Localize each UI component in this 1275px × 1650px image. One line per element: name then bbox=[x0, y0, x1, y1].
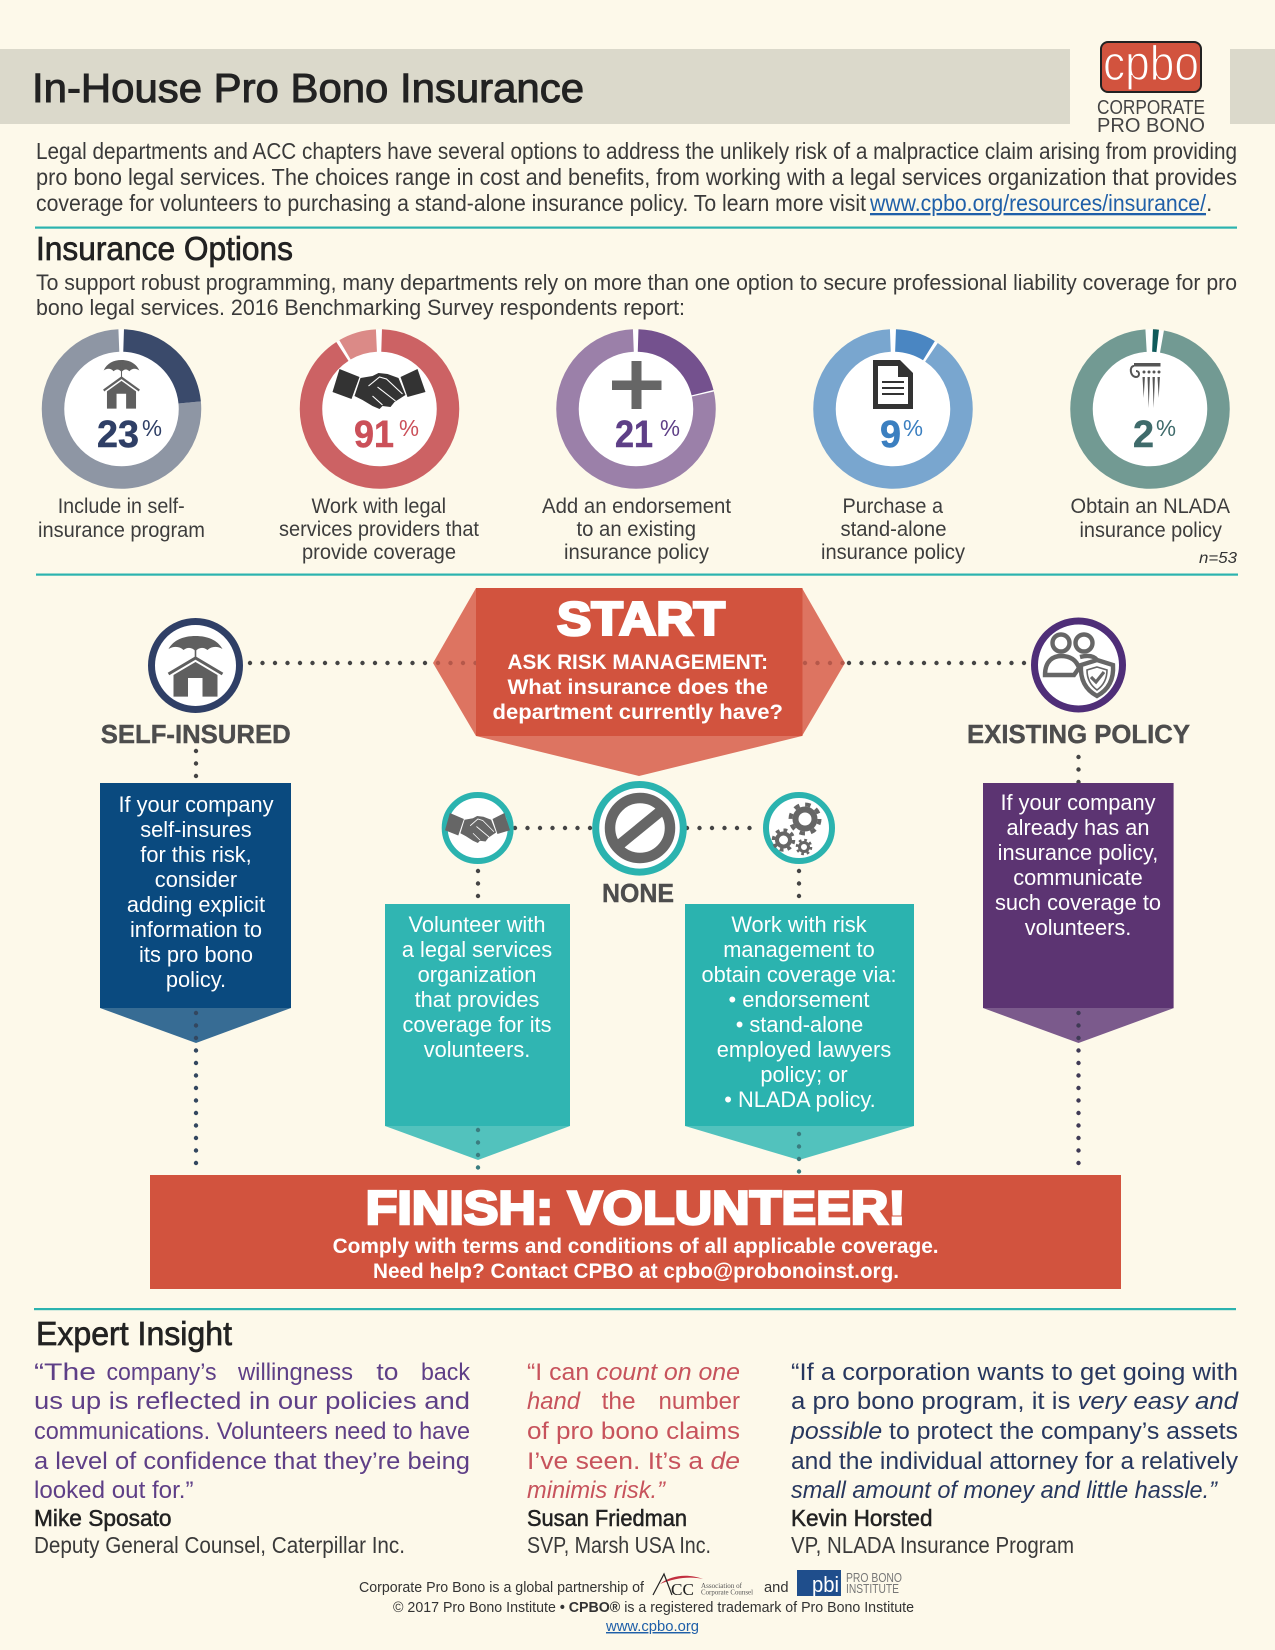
callout: legal services organization: coverage for its bbox=[402, 1012, 552, 1037]
callout: legal services organization: Volunteer with bbox=[409, 912, 545, 937]
callout: self-insured: for this risk, bbox=[140, 842, 252, 867]
donut chart: 91% legal services providers: 91 bbox=[354, 414, 394, 456]
quote: Susan Friedman: I’ve seen. It’s a de bbox=[527, 1448, 740, 1475]
icon: plus bbox=[612, 361, 662, 409]
sample size note: n=53 bbox=[1199, 550, 1237, 567]
logo: CPBO: cpbo bbox=[1103, 37, 1199, 91]
icon: self-insured circle bbox=[152, 622, 240, 710]
donut chart: 21% endorsement: % bbox=[660, 415, 680, 441]
quote: Mike Sposato: willingness bbox=[237, 1359, 353, 1386]
donut chart: 2% NLADA policy: % bbox=[1156, 415, 1176, 441]
title: In-House Pro Bono Insurance bbox=[32, 65, 584, 111]
intro paragraph: www.cpbo.org/resources/insurance/ bbox=[869, 190, 1207, 216]
quote: Mike Sposato: to bbox=[376, 1359, 398, 1386]
caption: self-insurance: insurance program bbox=[38, 518, 205, 542]
attribution: Kevin Horsted: Kevin Horsted bbox=[791, 1505, 932, 1531]
caption: legal services providers: Work with legal bbox=[312, 494, 446, 518]
caption: NLADA policy: insurance policy bbox=[1080, 518, 1222, 542]
finish banner: Need help? Contact CPBO at cpbo@probonoinst.org. bbox=[373, 1259, 899, 1283]
callout: risk management: management to bbox=[723, 937, 875, 962]
logo: ACC: CC bbox=[671, 1580, 694, 1599]
donut chart: 23% self-insurance: % bbox=[142, 415, 162, 441]
callout: self-insured: consider bbox=[155, 867, 237, 892]
insurance options intro text: bono legal services. 2016 Benchmarking Survey respondents report: bbox=[36, 295, 685, 320]
logo: ACC bbox=[653, 1574, 753, 1599]
quote: Susan Friedman: hand bbox=[527, 1388, 581, 1415]
callout: risk management: • NLADA policy. bbox=[724, 1087, 876, 1112]
caption: self-insurance bbox=[38, 494, 205, 542]
footer bbox=[359, 1570, 914, 1635]
quote: Susan Friedman: number bbox=[658, 1388, 740, 1415]
caption: self-insurance: Include in self- bbox=[58, 494, 185, 518]
icon: handshake circle bbox=[445, 795, 511, 861]
quote: Mike Sposato: company’s bbox=[106, 1359, 216, 1386]
label: existing policy: EXISTING POLICY bbox=[967, 719, 1190, 749]
callout: risk management: Work with risk bbox=[731, 912, 867, 937]
callout: existing policy: If your company bbox=[1000, 790, 1156, 815]
icon: umbrella over house bbox=[104, 360, 139, 409]
attribution: Susan Friedman bbox=[527, 1505, 711, 1558]
callout: existing policy: volunteers. bbox=[1025, 915, 1131, 940]
insurance options intro text: To support robust programming, many departments rely on more than one option to secure professional liability coverage for pro bbox=[36, 270, 1237, 295]
callout: existing policy: communicate bbox=[1013, 865, 1143, 890]
callout: legal services organization: a legal services bbox=[402, 937, 552, 962]
quote: Kevin Horsted: small amount of money and little hassle.” bbox=[791, 1477, 1219, 1504]
callout: risk management: employed lawyers bbox=[717, 1037, 891, 1062]
attribution: Mike Sposato: Mike Sposato bbox=[34, 1505, 172, 1531]
logo: ACC: Association of bbox=[701, 1582, 743, 1590]
connector dots: start to branches bbox=[196, 663, 1078, 904]
icon: existing policy circle bbox=[1034, 621, 1122, 709]
callout: risk management: obtain coverage via: bbox=[701, 962, 897, 987]
logo: ACC: Corporate Counsel bbox=[701, 1588, 753, 1596]
quote: Mike Sposato: looked out for.” bbox=[34, 1477, 194, 1504]
caption: endorsement: Add an endorsement bbox=[542, 494, 731, 518]
quote: Kevin Horsted bbox=[790, 1359, 1239, 1558]
caption: legal services providers: services providers that bbox=[279, 517, 479, 541]
start box: START bbox=[557, 592, 725, 645]
logo: Pro Bono Institute: PRO BONO bbox=[846, 1571, 902, 1585]
quote: Kevin Horsted: and the individual attorney for a relatively bbox=[791, 1448, 1239, 1475]
finish banner: Comply with terms and conditions of all applicable coverage. bbox=[333, 1234, 939, 1258]
donut chart: 21% endorsement: 21 bbox=[615, 414, 653, 456]
callout: risk management bbox=[685, 904, 914, 1175]
quote: Mike Sposato: “The bbox=[34, 1359, 96, 1386]
attribution: Mike Sposato: Deputy General Counsel, Caterpillar Inc. bbox=[34, 1532, 405, 1558]
callout: legal services organization: that provides bbox=[415, 987, 539, 1012]
footer: and bbox=[764, 1580, 788, 1596]
logo: Pro Bono Institute bbox=[797, 1570, 902, 1597]
donut chart: 91% legal services providers: % bbox=[399, 415, 419, 441]
callout: existing policy: such coverage to bbox=[995, 890, 1161, 915]
icon: handshake bbox=[332, 369, 426, 409]
attribution: Mike Sposato bbox=[34, 1505, 405, 1558]
heading: expert insight: Expert Insight bbox=[36, 1315, 232, 1352]
label: self-insured: SELF-INSURED bbox=[101, 719, 291, 749]
callout: self-insured: adding explicit bbox=[127, 892, 265, 917]
icon: none prohibition circle bbox=[596, 784, 683, 872]
donut chart: 91% legal services providers bbox=[300, 330, 459, 488]
donut chart: 21% endorsement bbox=[556, 330, 716, 488]
caption: stand-alone policy bbox=[821, 494, 965, 564]
attribution: Kevin Horsted: VP, NLADA Insurance Program bbox=[791, 1532, 1074, 1558]
quote: Mike Sposato: us up is reflected in our policies and bbox=[34, 1388, 470, 1415]
caption: endorsement: to an existing bbox=[576, 517, 696, 541]
donut chart: 23% self-insurance: 23 bbox=[97, 414, 139, 456]
logo: CPBO bbox=[1097, 37, 1205, 137]
donut chart: 9% stand-alone policy: % bbox=[903, 415, 923, 441]
logo: CPBO: PRO BONO bbox=[1097, 115, 1205, 137]
start box: department currently have? bbox=[492, 700, 783, 724]
caption: legal services providers: provide coverage bbox=[302, 540, 456, 564]
callout: existing policy bbox=[983, 783, 1174, 1175]
quote: Susan Friedman: the bbox=[602, 1388, 636, 1415]
icon: gears circle bbox=[766, 795, 832, 861]
attribution: Susan Friedman: SVP, Marsh USA Inc. bbox=[527, 1532, 711, 1558]
footer: www.cpbo.org bbox=[605, 1619, 699, 1635]
attribution: Kevin Horsted bbox=[791, 1505, 1074, 1558]
quote: Susan Friedman: minimis risk.” bbox=[527, 1477, 667, 1504]
donut chart: 9% stand-alone policy bbox=[814, 330, 972, 488]
caption: stand-alone policy: stand-alone bbox=[840, 517, 946, 541]
label: none: NONE bbox=[602, 878, 674, 908]
caption: stand-alone policy: insurance policy bbox=[821, 540, 965, 564]
logo: Pro Bono Institute: INSTITUTE bbox=[846, 1582, 899, 1596]
callout: existing policy: already has an bbox=[1006, 815, 1150, 840]
callout: self-insured: policy. bbox=[166, 967, 226, 992]
donut chart: 2% NLADA policy bbox=[1070, 330, 1230, 488]
title bar bbox=[0, 49, 1275, 124]
callout: self-insured: information to bbox=[130, 917, 262, 942]
start box bbox=[433, 588, 845, 776]
start box: What insurance does the bbox=[508, 675, 768, 699]
callout: self-insured: its pro bono bbox=[139, 942, 253, 967]
start box: ASK RISK MANAGEMENT: bbox=[508, 650, 768, 674]
icon: column bbox=[1131, 363, 1160, 408]
icon: document bbox=[873, 360, 913, 409]
insurance options intro text bbox=[36, 270, 1237, 320]
quote: Susan Friedman: “I can count on one bbox=[527, 1359, 740, 1386]
quote: Mike Sposato: a level of confidence that they’re being bbox=[34, 1448, 470, 1475]
quote: Mike Sposato: back bbox=[421, 1359, 471, 1386]
callout: risk management: policy; or bbox=[760, 1062, 848, 1087]
caption: NLADA policy bbox=[1070, 494, 1231, 542]
callout: self-insured: If your company bbox=[118, 792, 274, 817]
caption: endorsement: insurance policy bbox=[564, 540, 709, 564]
caption: legal services providers bbox=[279, 494, 479, 564]
footer: Corporate Pro Bono is a global partnership of bbox=[359, 1580, 645, 1596]
donut chart: 9% stand-alone policy: 9 bbox=[880, 414, 901, 456]
intro paragraph: . bbox=[1206, 190, 1212, 216]
callout: legal services organization: volunteers. bbox=[424, 1037, 530, 1062]
callout: existing policy: insurance policy, bbox=[998, 840, 1158, 865]
caption: NLADA policy: Obtain an NLADA bbox=[1070, 494, 1231, 518]
finish banner: FINISH: VOLUNTEER! bbox=[366, 1181, 906, 1234]
quote: Susan Friedman bbox=[527, 1359, 740, 1558]
footer: © 2017 Pro Bono Institute • CPBO® is a registered trademark of Pro Bono Institute bbox=[393, 1600, 914, 1616]
quote: Mike Sposato: communications. Volunteers need to have bbox=[34, 1418, 470, 1445]
donut chart: 2% NLADA policy: 2 bbox=[1133, 414, 1154, 456]
finish banner bbox=[150, 1175, 1121, 1289]
quote: Susan Friedman: of pro bono claims bbox=[527, 1418, 740, 1445]
caption: endorsement bbox=[542, 494, 731, 564]
callout: risk management: • endorsement bbox=[729, 987, 869, 1012]
callout: legal services organization bbox=[385, 904, 570, 1170]
quote: Kevin Horsted: a pro bono program, it is very easy and bbox=[791, 1388, 1239, 1415]
intro paragraph: pro bono legal services. The choices range in cost and benefits, from working with a legal services organization that provides bbox=[36, 164, 1237, 190]
quote: Kevin Horsted: possible to protect the company’s assets bbox=[790, 1418, 1238, 1445]
callout: self-insured bbox=[100, 783, 291, 1175]
quote: Kevin Horsted: “If a corporation wants to get going with bbox=[791, 1359, 1238, 1386]
callout: legal services organization: organization bbox=[418, 962, 536, 987]
intro paragraph: coverage for volunteers to purchasing a stand-alone insurance policy. To learn more visit bbox=[36, 190, 867, 216]
quote: Mike Sposato bbox=[34, 1359, 471, 1558]
logo: CPBO: CORPORATE bbox=[1097, 97, 1205, 119]
caption: stand-alone policy: Purchase a bbox=[842, 494, 943, 518]
callout: risk management: • stand-alone bbox=[736, 1012, 863, 1037]
attribution: Susan Friedman: Susan Friedman bbox=[527, 1505, 687, 1531]
intro paragraph bbox=[36, 138, 1237, 216]
heading: insurance options: Insurance Options bbox=[36, 230, 293, 267]
callout: self-insured: self-insures bbox=[140, 817, 252, 842]
donut chart: 23% self-insurance bbox=[42, 330, 201, 488]
logo: Pro Bono Institute: pbi bbox=[812, 1572, 839, 1597]
